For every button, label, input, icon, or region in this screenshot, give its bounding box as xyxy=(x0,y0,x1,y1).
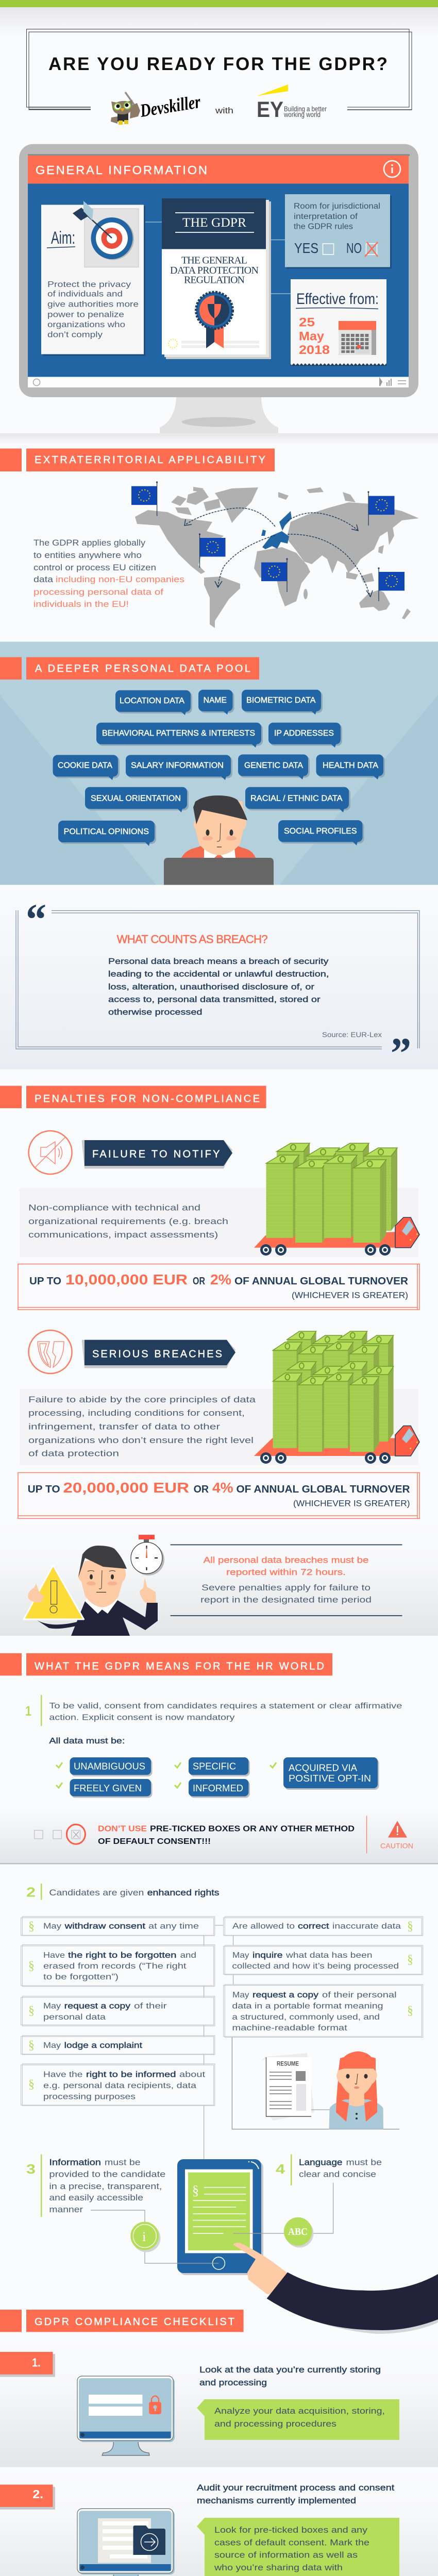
right: to be forgotten xyxy=(21,1945,215,1987)
right: lodge complaint: § xyxy=(28,2039,35,2052)
callout: Look for pre-ticked boxes and any xyxy=(214,2525,368,2535)
top green bar xyxy=(0,0,438,36)
quote frame xyxy=(16,910,419,1049)
right: inquire data: § xyxy=(407,1953,413,1967)
dashed arcs xyxy=(186,508,370,597)
item 4: language: must be xyxy=(346,2158,382,2167)
item 1: consent xyxy=(25,1695,402,1726)
icon: calendar xyxy=(339,321,376,355)
right: withdraw consent xyxy=(21,1917,215,1936)
callout xyxy=(197,2399,399,2440)
callout: first fine: OF ANNUAL GLOBAL TURNOVER xyxy=(234,1276,409,1287)
right: to be informed: e.g. personal data recipients, data xyxy=(43,2081,196,2090)
right: withdraw consent: May xyxy=(43,1922,61,1931)
item 3: information: and easily accessible xyxy=(49,2193,143,2202)
icon: broken shield xyxy=(29,1330,72,1374)
icon: stopwatch xyxy=(131,1535,164,1575)
breach heading: WHAT COUNTS AS BREACH? xyxy=(117,933,268,946)
card: jurisdictional interpretation: interpretation of xyxy=(294,212,358,221)
right: lodge complaint xyxy=(21,2036,215,2055)
item 1: consent: To be valid, consent from candidates requires a statement or clear affirmative xyxy=(49,1702,402,1710)
effective date xyxy=(299,315,330,357)
EU in blue xyxy=(261,511,292,549)
panel: 72 hours reporting xyxy=(0,1520,438,1636)
document subtitle: THE GENERAL xyxy=(181,255,247,266)
heading: HR world: WHAT THE GDPR MEANS FOR THE HR WORLD xyxy=(35,1660,324,1672)
aim text: don’t comply xyxy=(47,331,103,339)
flag 4 xyxy=(261,558,288,592)
right: to be forgotten: erased from records (“The right xyxy=(43,1962,187,1971)
right: request copy xyxy=(21,1996,215,2026)
person with warning sign xyxy=(24,1546,158,1636)
ribbon: serious breaches xyxy=(82,1340,235,1368)
heading: extraterritorial applicability xyxy=(0,449,275,471)
step heading: Audit your recruitment process and consent xyxy=(197,2483,395,2493)
truck with money: serious breaches xyxy=(254,1331,419,1464)
map land xyxy=(135,487,419,628)
item 2: enhanced rights: enhanced rights xyxy=(147,1888,220,1897)
callout: who you’re sharing data with xyxy=(214,2563,343,2572)
hand and sleeve xyxy=(233,2243,438,2334)
step heading: Look at the data you’re currently storing xyxy=(199,2365,381,2375)
aim text: of individuals and xyxy=(47,290,123,299)
icon: info circle xyxy=(130,2222,161,2252)
bubble: sexual orientation xyxy=(85,787,189,812)
callout: second fine: 4% xyxy=(212,1480,233,1496)
reporting text: All personal data breaches must be xyxy=(204,1555,368,1565)
heading: a deeper personal data pool xyxy=(0,657,259,680)
woman xyxy=(329,2052,383,2129)
logo: Devskiller owl and wordmark xyxy=(111,91,203,125)
item 3: information: 3 xyxy=(26,2161,36,2177)
bubble: genetic data: GENETIC DATA xyxy=(244,761,303,770)
callout: first fine: 10,000,000 EUR xyxy=(65,1272,188,1287)
handwritten aim label xyxy=(47,228,75,248)
logo: EY: Building a better xyxy=(284,105,327,113)
reporting text: Severe penalties apply for failure to xyxy=(201,1583,370,1592)
header bar: GENERAL INFORMATION xyxy=(36,163,207,177)
callout: second fine xyxy=(18,1472,419,1519)
right: inquire data: May xyxy=(232,1951,249,1960)
bubble: political opinions: POLITICAL OPINIONS xyxy=(64,827,149,836)
check marks xyxy=(56,1762,276,1788)
pill: informed: INFORMED xyxy=(193,1783,243,1793)
card: effective from: Effective from: xyxy=(296,291,379,308)
bubble: racial ethnic data: RACIAL / ETHNIC DATA xyxy=(250,794,343,803)
callout: cases of default consent. Mark the xyxy=(214,2538,369,2547)
icon: info circle: i xyxy=(142,2229,146,2244)
icon: caution triangle: CAUTION xyxy=(380,1842,413,1850)
pills: data conditions xyxy=(56,1757,379,1798)
right: to be informed: Have the xyxy=(43,2070,83,2079)
right: to be forgotten: to be forgotten”) xyxy=(43,1973,119,1981)
text: extraterritorial explanation: data xyxy=(33,574,54,584)
panel: what counts as breach xyxy=(0,885,438,1078)
closing quotation mark: ” xyxy=(391,1028,411,1078)
item 4: language: 4 xyxy=(276,2161,285,2177)
illustration: woman with resume xyxy=(232,2037,399,2129)
breach definition: Personal data breach means a breach of security xyxy=(108,957,328,966)
number tag xyxy=(0,2352,55,2377)
bubble: behavioral patterns: BEHAVIORAL PATTERNS & INTERESTS xyxy=(102,729,255,738)
number tag: 1. xyxy=(32,2356,41,2369)
right: portable copy: machine-readable format xyxy=(232,2024,347,2032)
reporting text xyxy=(200,1555,372,1605)
illustration: tablet and hand xyxy=(91,2159,438,2334)
step heading: and processing xyxy=(199,2378,267,2387)
warning text: OF DEFAULT CONSENT!!! xyxy=(98,1837,211,1846)
breach definition xyxy=(108,957,329,1017)
handwritten aim label: Aim: xyxy=(51,228,75,248)
item 3: information: manner xyxy=(49,2205,83,2214)
icon: target with arrow xyxy=(73,201,139,267)
step heading: mechanisms currently implemented xyxy=(197,2496,356,2505)
checklist step 1 xyxy=(0,2339,438,2467)
document subtitle: DATA PROTECTION xyxy=(170,265,259,276)
pill: specific: SPECIFIC xyxy=(193,1760,236,1771)
bubble: name: NAME xyxy=(204,696,227,705)
right: portable copy: of their personal xyxy=(322,1991,397,1999)
right: correct data xyxy=(224,1917,423,1936)
reporting text: reported within 72 hours. xyxy=(226,1567,346,1577)
bubble: salary information: SALARY INFORMATION xyxy=(131,761,224,770)
document: the GDPR: THE GDPR xyxy=(182,216,246,230)
panel: serious breaches description: of data protection xyxy=(28,1449,119,1458)
pill: unambiguous: UNAMBIGUOUS xyxy=(74,1760,145,1771)
title frame xyxy=(27,29,412,110)
text: extraterritorial explanation: control or process EU citizen xyxy=(33,563,156,572)
reporting rule lines xyxy=(171,1545,402,1616)
monitor body xyxy=(19,144,418,397)
tablet: § xyxy=(192,2183,199,2198)
flag 5 xyxy=(378,567,405,601)
document subtitle: REGULATION xyxy=(184,274,245,285)
right: to be informed: about xyxy=(179,2070,206,2079)
bubble: health data: HEALTH DATA xyxy=(323,761,378,770)
callout xyxy=(197,2518,399,2576)
right: portable copy: a structured, commonly used, and xyxy=(232,2013,380,2022)
right: inquire data: collected and how it’s being processed xyxy=(232,1962,399,1971)
resume xyxy=(261,2053,330,2121)
callout: second fine: (WHICHEVER IS GREATER) xyxy=(293,1499,410,1509)
callout: first fine: OR xyxy=(193,1276,205,1287)
right: portable copy: May xyxy=(232,1991,249,1999)
header bar xyxy=(28,156,409,183)
heading: penalties: PENALTIES FOR NON-COMPLIANCE xyxy=(35,1093,260,1105)
bubble: biometric data xyxy=(242,690,323,715)
panel: serious breaches description: infringement, transfer of data to other xyxy=(28,1422,221,1432)
right: inquire data: what data has been xyxy=(285,1951,372,1960)
callout: second fine: OR xyxy=(194,1484,209,1495)
flag 3 xyxy=(199,533,226,568)
bubble: location data: LOCATION DATA xyxy=(120,697,184,705)
icon: seal with ribbon xyxy=(196,292,233,348)
right: correct data: § xyxy=(407,1920,413,1933)
warning text: PRE-TICKED BOXES OR ANY OTHER METHOD xyxy=(150,1824,355,1833)
panel: failure to notify description: Non-compliance with technical and xyxy=(28,1204,200,1213)
item 3: information xyxy=(26,2155,165,2217)
yes no checkboxes xyxy=(294,240,378,257)
bubble: political opinions xyxy=(58,821,156,846)
rights connector lines xyxy=(204,1925,233,2182)
right: request copy: request a copy xyxy=(64,2002,130,2010)
text: extraterritorial explanation xyxy=(33,538,184,609)
text: extraterritorial explanation: individuals in the EU! xyxy=(33,599,129,609)
breach definition: loss, alteration, unauthorised disclosure of, or xyxy=(108,983,315,991)
callout: first fine xyxy=(18,1264,419,1310)
opening quotation mark: “ xyxy=(26,894,46,944)
document stars and lines xyxy=(169,339,259,348)
heading: extraterritorial applicability: EXTRATERRITORIAL APPLICABILITY xyxy=(35,454,265,466)
breach definition: otherwise processed xyxy=(108,1008,202,1017)
bubble: racial ethnic data xyxy=(245,787,350,812)
item 4: language xyxy=(276,2155,382,2185)
person at laptop xyxy=(164,795,274,885)
icon: ABC circle xyxy=(284,2217,313,2247)
right: request copy: of their xyxy=(134,2002,167,2010)
panel: general information monitor xyxy=(19,144,418,433)
logo: Devskiller owl and wordmark: Devskiller xyxy=(138,91,203,121)
bubble: sexual orientation: SEXUAL ORIENTATION xyxy=(91,794,181,803)
right: to be forgotten: § xyxy=(28,1959,35,1973)
panel: serious breaches description: Failure to abide by the core principles of data xyxy=(28,1395,256,1404)
item 1: consent: action. Explicit consent is now mandatory xyxy=(49,1714,234,1722)
warning text xyxy=(98,1824,355,1846)
panel: failure to notify description xyxy=(20,1188,418,1257)
warning text: DON’T USE xyxy=(98,1824,147,1833)
warning triangle xyxy=(24,1565,84,1619)
aim text: power to penalize xyxy=(47,310,124,319)
number tag: 2. xyxy=(32,2487,43,2501)
card: jurisdictional interpretation: Room for jurisdictional xyxy=(294,202,380,211)
callout: source of information as well as xyxy=(214,2550,358,2560)
band under monitor xyxy=(0,433,438,445)
laptop xyxy=(164,858,274,885)
pill: informed xyxy=(189,1779,250,1798)
chart: world map xyxy=(131,481,419,628)
right: portable copy xyxy=(224,1985,423,2037)
right: request copy: May xyxy=(43,2002,61,2010)
right: to be forgotten: Have xyxy=(43,1951,65,1960)
ribbon: failure to notify: FAILURE TO NOTIFY xyxy=(92,1149,220,1160)
bubble: cookie data: COOKIE DATA xyxy=(58,761,112,770)
logo: EY: EY xyxy=(257,97,283,122)
right: portable copy: request a copy xyxy=(252,1991,318,1999)
right: portable copy: data in a portable format meaning xyxy=(232,2002,383,2010)
right: to be informed xyxy=(21,2064,215,2106)
right: correct data: inaccurate data xyxy=(332,1922,401,1931)
icon: monitor with lock xyxy=(77,2376,175,2455)
right: to be informed: § xyxy=(28,2078,35,2091)
status bar xyxy=(28,377,409,387)
monitor stand xyxy=(160,397,278,433)
bubble: ip addresses: IP ADDRESSES xyxy=(274,729,334,738)
effective date: May xyxy=(299,330,325,343)
heading: compliance checklist xyxy=(0,2310,244,2332)
checklist step 2 xyxy=(0,2467,438,2576)
arc arrow heads xyxy=(184,519,373,597)
document: the GDPR xyxy=(162,198,271,359)
right: request copy: § xyxy=(28,2004,35,2018)
heading: HR world xyxy=(0,1653,332,1675)
text: extraterritorial explanation: processing personal data of xyxy=(33,587,163,597)
pill: acquired via opt-in xyxy=(283,1757,379,1790)
step heading xyxy=(199,2365,381,2387)
bubble: behavioral patterns xyxy=(96,723,263,748)
logo: EY: working world xyxy=(283,111,321,118)
right: correct data: correct xyxy=(298,1922,329,1931)
panel: serious breaches description: organizations who don’t ensure the right level xyxy=(28,1436,254,1445)
text: extraterritorial explanation: including non-EU companies xyxy=(56,574,184,584)
pill: acquired via opt-in: ACQUIRED VIA xyxy=(289,1762,358,1773)
icon: checkboxes xyxy=(35,1824,85,1844)
with label: with xyxy=(215,106,233,115)
number tag xyxy=(0,2485,55,2510)
icon: monitor with folder xyxy=(77,2509,175,2576)
connectors xyxy=(144,222,291,294)
aim text: Protect the privacy xyxy=(47,280,131,289)
pointing hand xyxy=(140,1578,156,1603)
right: correct data: Are allowed to xyxy=(232,1922,295,1931)
text: extraterritorial explanation: to entities anywhere who xyxy=(33,550,142,560)
item 1: consent: 1 xyxy=(25,1703,31,1719)
hand holding triangle xyxy=(28,1584,44,1602)
card: effective from xyxy=(291,279,386,366)
item 3: information: must be xyxy=(105,2158,141,2167)
right: lodge complaint: lodge a complaint xyxy=(64,2041,143,2050)
title: ARE YOU READY FOR THE GDPR? xyxy=(48,54,388,74)
ribbon: failure to notify xyxy=(82,1140,232,1168)
callout: first fine: UP TO xyxy=(29,1276,61,1287)
callout: and processing procedures xyxy=(214,2419,336,2429)
right: inquire data xyxy=(224,1945,423,1975)
pill: freely given xyxy=(70,1779,153,1798)
item 3: information: in a precise, transparent, xyxy=(49,2182,162,2191)
right: to be forgotten: and xyxy=(180,1951,196,1960)
truck with money: failure to notify xyxy=(254,1143,419,1256)
heading: compliance checklist: GDPR COMPLIANCE CHECKLIST xyxy=(35,2316,234,2328)
pill: acquired via opt-in: POSITIVE OPT-IN xyxy=(289,1773,371,1784)
card: jurisdictional interpretation: the GDPR rules xyxy=(294,223,353,231)
pill: freely given: FREELY GIVEN xyxy=(74,1783,142,1793)
pill: specific xyxy=(189,1757,250,1776)
aim text xyxy=(47,280,139,339)
step heading xyxy=(197,2483,395,2505)
item 3: information: Information xyxy=(49,2158,101,2167)
right: lodge complaint: May xyxy=(43,2041,61,2050)
item 4: language: clear and concise xyxy=(299,2170,376,2179)
panel: failure to notify description: communications, impact assessments) xyxy=(28,1230,218,1240)
document subtitle xyxy=(170,255,259,285)
bubble: salary information xyxy=(126,755,232,780)
right: request copy: personal data xyxy=(43,2013,106,2022)
item 2: enhanced rights: 2 xyxy=(26,1885,36,1900)
tablet xyxy=(177,2159,263,2275)
right: withdraw consent: § xyxy=(28,1920,35,1933)
item 3: information: provided to the candidate xyxy=(49,2170,165,2179)
callout: first fine: 2% xyxy=(210,1272,231,1287)
bubble: cookie data xyxy=(53,755,120,780)
effective date: 25 xyxy=(299,315,315,330)
bubble: name xyxy=(198,690,234,715)
panel: personal data pool xyxy=(0,642,438,885)
right: portable copy: § xyxy=(407,2004,413,2018)
right: to be informed: right to be informed xyxy=(86,2070,176,2079)
icon: caution triangle xyxy=(380,1821,413,1850)
right: inquire data: inquire xyxy=(252,1951,283,1960)
flag 2 xyxy=(367,491,395,526)
all data must be: All data must be: xyxy=(49,1737,125,1745)
text: extraterritorial explanation: The GDPR applies globally xyxy=(33,538,146,548)
callout: second fine: 20,000,000 EUR xyxy=(63,1480,189,1496)
icon: muted speaker xyxy=(29,1131,72,1174)
right: withdraw consent: withdraw consent xyxy=(64,1922,146,1931)
right: to be forgotten: the right to be forgotten xyxy=(68,1951,176,1960)
icon: ABC circle: ABC xyxy=(288,2226,308,2238)
bubble: social profiles: SOCIAL PROFILES xyxy=(284,827,357,836)
callout: second fine: OF ANNUAL GLOBAL TURNOVER xyxy=(236,1484,410,1495)
item 4: language: Language xyxy=(299,2158,342,2167)
pill: unambiguous xyxy=(70,1757,153,1776)
bubble: location data xyxy=(115,690,192,715)
panel: failure to notify description: organizational requirements (e.g. breach xyxy=(28,1217,228,1226)
breach definition: leading to the accidental or unlawful destruction, xyxy=(108,970,329,979)
resume: RESUME xyxy=(277,2061,299,2067)
right: to be informed: processing purposes xyxy=(43,2093,136,2101)
ribbon: serious breaches: SERIOUS BREACHES xyxy=(92,1349,222,1360)
bubble: biometric data: BIOMETRIC DATA xyxy=(246,696,316,705)
yes no checkboxes: NO xyxy=(346,240,362,256)
item 2: enhanced rights: Candidates are given xyxy=(49,1888,144,1897)
panel: pre-ticked warning xyxy=(0,1807,438,1864)
reporting text: report in the designated time period xyxy=(200,1596,372,1605)
logo: EY xyxy=(257,84,327,122)
panel: serious breaches description xyxy=(20,1389,418,1465)
panel: serious breaches description: processing, including conditions for consent, xyxy=(28,1409,245,1418)
connector lines to tablet xyxy=(91,2183,333,2263)
bubble: genetic data xyxy=(238,754,310,779)
right: withdraw consent: at any time xyxy=(148,1922,199,1931)
breach definition: access to, personal data transmitted, stored or xyxy=(108,995,321,1004)
heading: a deeper personal data pool: A DEEPER PERSONAL DATA POOL xyxy=(35,663,250,674)
bubble: health data xyxy=(316,754,385,779)
heading: penalties xyxy=(0,1086,266,1108)
aim text: give authorities more xyxy=(47,300,139,309)
callout: second fine: UP TO xyxy=(28,1484,60,1495)
effective date: 2018 xyxy=(299,343,330,357)
bubble: ip addresses xyxy=(268,723,342,748)
card: aim xyxy=(41,201,145,355)
item 2: enhanced rights xyxy=(26,1884,220,1900)
callout: Analyze your data acquisition, storing, xyxy=(214,2406,385,2416)
callout: first fine: (WHICHEVER IS GREATER) xyxy=(292,1290,408,1300)
source: Source: EUR-Lex xyxy=(322,1031,382,1039)
bubble: social profiles xyxy=(278,820,364,845)
aim text: organizations who xyxy=(47,320,125,329)
card: jurisdictional interpretation xyxy=(285,194,392,269)
flag 1 xyxy=(131,481,158,516)
yes no checkboxes: YES xyxy=(294,240,318,256)
